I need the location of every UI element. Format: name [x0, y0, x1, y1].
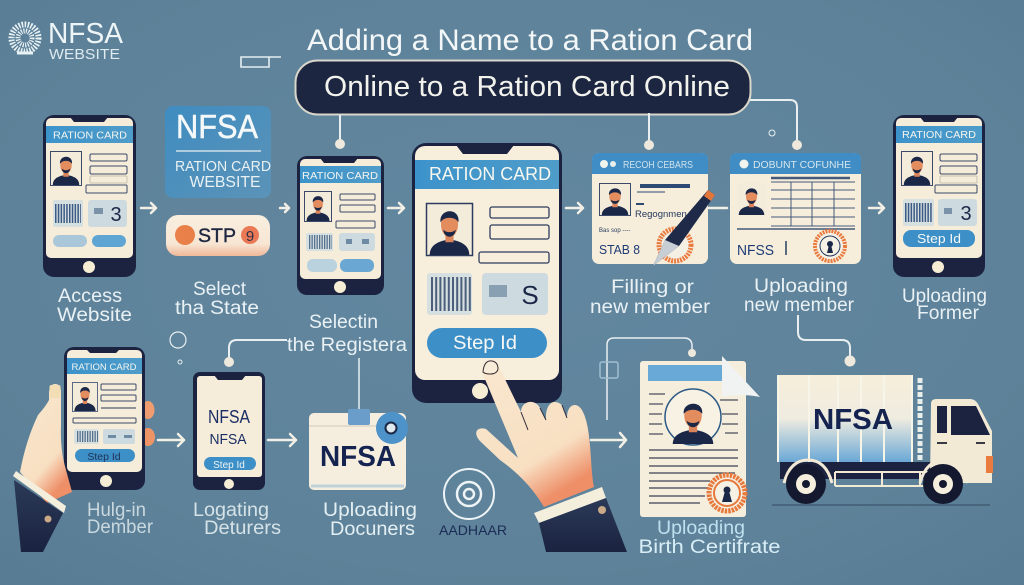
icon: pointing hand: [476, 361, 627, 552]
photo: [50, 152, 82, 186]
icon: shell emblem: [12, 24, 38, 53]
subtitle pill: [296, 60, 750, 114]
barcode: [903, 199, 934, 226]
photo: [600, 184, 630, 216]
card: filling new member: Regognmen: [635, 209, 687, 220]
truck: [772, 375, 993, 505]
seal: [709, 475, 745, 511]
photo: [665, 389, 721, 445]
label: uploading former: Former: [917, 303, 980, 324]
heading: NFSA: [176, 108, 258, 145]
label: fill-in member: Hulg-in: [87, 500, 146, 521]
form fields: [73, 384, 136, 423]
button: Step Id: [917, 231, 961, 246]
Aadhaar label: AADHAAR: [439, 522, 507, 538]
info box: S: [521, 280, 539, 310]
title: Adding a Name to a Ration Card: [307, 24, 753, 57]
header text: RATION CARD: [902, 129, 976, 141]
info box: [103, 429, 135, 444]
label: fill-in member: [87, 500, 154, 538]
home button: [100, 475, 112, 487]
step badge: STP: [198, 226, 236, 247]
NFSA text: NFSA: [210, 431, 246, 448]
small decorative icon: top left: [241, 57, 281, 67]
home button: [334, 281, 346, 293]
label: selecting the registrar: Selectin: [309, 312, 378, 333]
icon: Aadhaar: [439, 469, 507, 538]
header text: RATION CARD: [72, 362, 137, 373]
header text: RATION CARD: [429, 164, 551, 184]
label: uploading former: [902, 286, 987, 324]
subtitle text: Online to a Ration Card Online: [324, 71, 730, 103]
form lines: [636, 186, 690, 204]
label: filling new member: new member: [590, 297, 711, 318]
phone: uploading former: [893, 115, 985, 277]
pen: [653, 190, 715, 266]
cuff button: [598, 506, 606, 514]
photo: [72, 382, 98, 412]
phone: fill-in member: [64, 347, 145, 490]
rear wheel: [784, 460, 832, 504]
barcode: [53, 200, 83, 227]
label: filling new member: Filling or: [611, 277, 695, 298]
label: uploading documents: Uploading: [323, 500, 417, 521]
info box: [88, 200, 127, 227]
button: Step Id: [213, 460, 245, 471]
body text: WEBSITE: [190, 174, 260, 191]
info box: [938, 199, 977, 226]
sleeve: [14, 480, 63, 552]
form fields: [336, 194, 375, 228]
label: uploading birth certificate: Birth Certifrate: [638, 537, 780, 558]
card header text: DOBUNT COFUNHE: [753, 160, 851, 171]
photo: [426, 204, 472, 256]
front wheel: [920, 460, 968, 504]
label: uploading birth certificate: Uploading: [657, 518, 745, 539]
big phone: ration card: [412, 143, 562, 403]
barcode: [74, 429, 99, 444]
label: uploading documents: Docuners: [330, 519, 415, 540]
label: locating details: [193, 500, 281, 539]
cuff: [13, 471, 66, 513]
label: uploading documents: [323, 500, 417, 540]
info box: 3: [960, 203, 972, 225]
palm and thumb: [20, 384, 72, 503]
document: birth certificate: [640, 356, 760, 517]
photo: [304, 192, 332, 222]
seal: [815, 231, 845, 261]
barcode: [306, 233, 333, 251]
label: uploading new member: Uploading: [754, 276, 848, 297]
text lines: [649, 394, 738, 503]
ground shadow: [772, 504, 990, 506]
arrows: [141, 203, 884, 447]
seal: [659, 229, 691, 261]
cuff: [534, 487, 606, 523]
cuff button: [44, 516, 52, 522]
label: uploading new member: [744, 276, 855, 316]
photo: [737, 183, 766, 215]
buttons: [307, 259, 374, 272]
body text: RATION CARD: [175, 158, 271, 175]
label: uploading birth certificate: [638, 518, 780, 558]
NFSA text: [208, 407, 250, 448]
header text: RATION CARD: [53, 130, 127, 142]
NFSA text: NFSA: [208, 407, 250, 427]
tab: [348, 409, 370, 425]
home button: [932, 261, 944, 273]
stamp text: NFSS: [737, 242, 774, 259]
home button: [83, 261, 95, 273]
folded corner: [722, 356, 760, 397]
label: selecting the registrar: [287, 312, 407, 356]
step badge: 9: [246, 228, 254, 245]
body text: [175, 158, 271, 191]
badge: [376, 412, 408, 444]
ladder: [918, 378, 922, 463]
stamp text: STAB 8: [599, 242, 640, 257]
card: filling new member: [592, 153, 715, 266]
hand holding phone: [13, 347, 155, 552]
button: [903, 230, 975, 247]
label: select the state: tha State: [175, 298, 259, 319]
button: [75, 449, 135, 463]
label: locating details: Logating: [193, 500, 269, 521]
logo subtitle: WEBSITE: [49, 46, 120, 63]
form fields: [86, 154, 127, 193]
phone: selecting registrar: [297, 156, 384, 295]
phone: NFSA screen: [193, 372, 265, 490]
logo wordmark: NFSA: [48, 18, 124, 50]
truck lettering: NFSA: [813, 404, 893, 436]
button: Step Id: [87, 451, 121, 463]
sleeve: [539, 498, 627, 552]
info box: [482, 273, 548, 315]
phone: access website: [43, 115, 136, 277]
thumbnail: [50, 385, 60, 398]
label: access website: Website: [57, 305, 132, 326]
label: select the state: Select: [193, 279, 247, 300]
form fields: [935, 154, 977, 193]
label: access website: [57, 286, 132, 326]
label: filling new member: [590, 277, 711, 318]
photo: [902, 152, 932, 186]
home button: [472, 383, 488, 399]
chassis: [780, 462, 932, 479]
label: select the state: [175, 279, 259, 319]
form fields: [479, 207, 549, 263]
label: uploading former: Uploading: [902, 286, 987, 307]
button: Step Id: [453, 333, 517, 354]
cab: [930, 399, 992, 483]
barcode: [427, 273, 472, 315]
card: document: [730, 153, 861, 264]
home button: [224, 479, 234, 489]
card: NFSA documents: [309, 409, 408, 490]
step badge: [166, 215, 270, 256]
table: [737, 178, 855, 229]
label: selecting the registrar: the Registera: [287, 335, 407, 356]
panel: NFSA ration card website: [165, 106, 271, 198]
card text: NFSA: [320, 441, 396, 473]
card: filling new member: Bas sop ----: [599, 228, 630, 234]
label: fill-in member: Dember: [87, 517, 154, 538]
logo: NFSA website: [12, 18, 124, 63]
info box: 3: [110, 204, 122, 226]
header text: RATION CARD: [302, 170, 378, 182]
label: uploading new member: new member: [744, 295, 855, 316]
fingers behind phone: [141, 401, 155, 446]
buttons: [53, 235, 126, 247]
cargo box: [777, 375, 913, 462]
connector lines: [170, 100, 856, 420]
info box: [339, 233, 375, 251]
card header text: RECOH CEBARS: [623, 160, 693, 171]
document header: [648, 365, 722, 381]
label: locating details: Deturers: [204, 518, 281, 539]
button: [427, 328, 547, 358]
label: access website: Access: [58, 286, 122, 307]
